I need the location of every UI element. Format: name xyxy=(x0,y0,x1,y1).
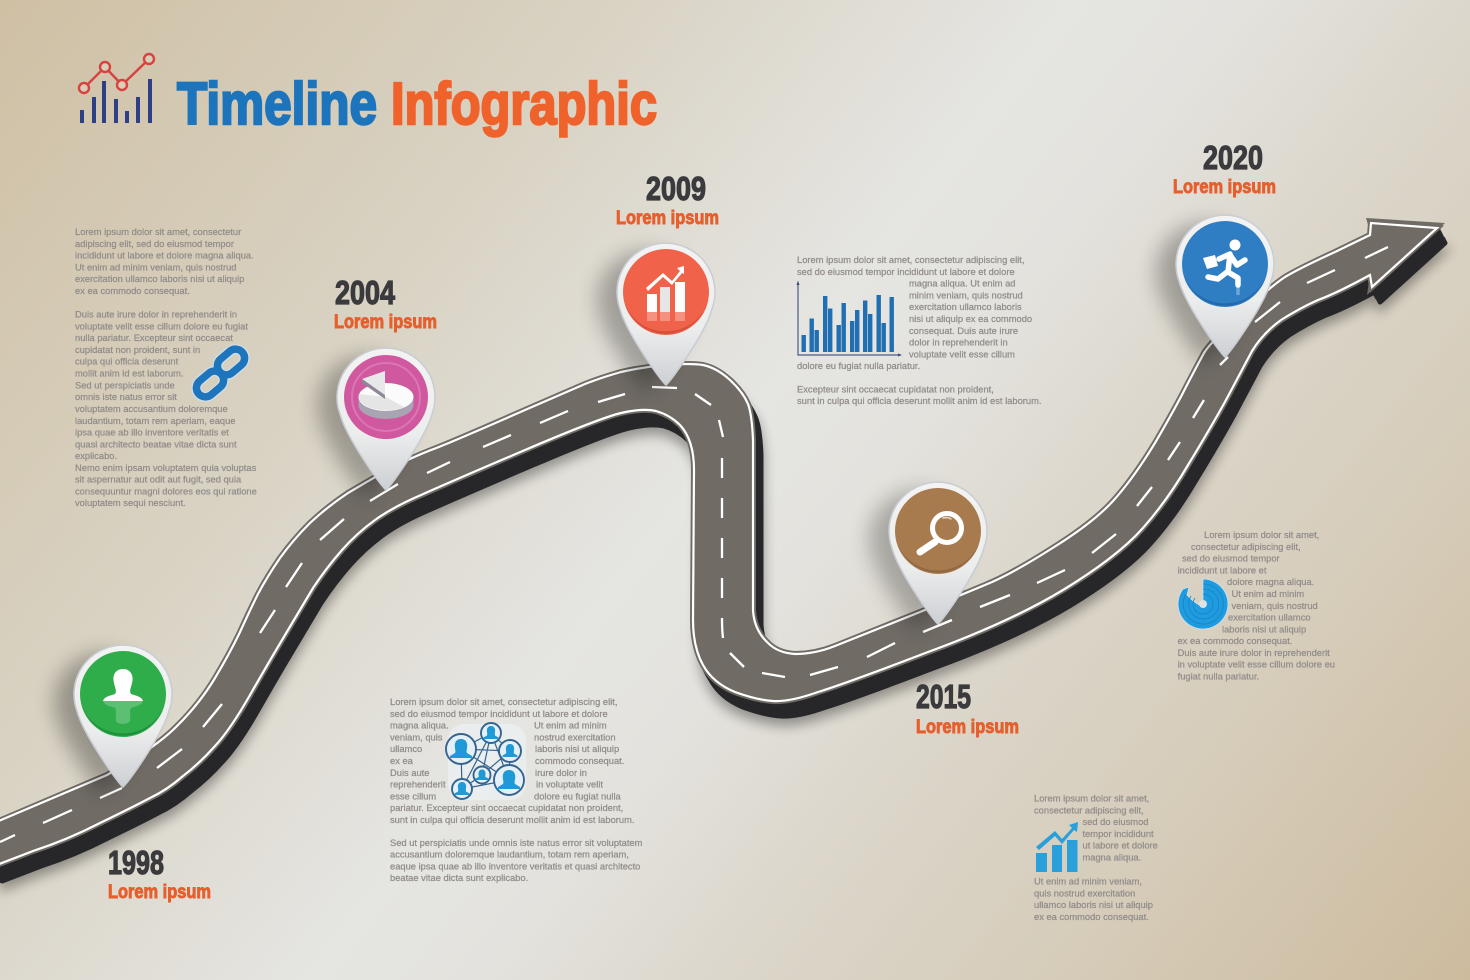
label 2015: Lorem ipsum xyxy=(916,717,1019,738)
text block: right with radial icon: veniam, quis nostrud xyxy=(1232,601,1318,611)
text block: right with radial icon: Lorem ipsum dolor sit amet, xyxy=(1204,530,1319,540)
title: Timeline xyxy=(177,71,377,137)
text block: lower centre with network icon: Duis aute xyxy=(390,768,429,778)
text block: right with radial icon: incididunt ut labore et xyxy=(1178,565,1267,575)
title xyxy=(177,71,657,137)
text block: bottom right with growth icon: Ut enim ad minim veniam, xyxy=(1034,876,1142,886)
text block: left column with link icon: Duis aute irure dolor in reprehenderit in xyxy=(75,310,237,320)
text block: right with radial icon: sed do eiusmod tempor xyxy=(1182,554,1280,564)
text block: lower centre with network icon: sed do eiusmod tempor incididunt ut labore et dolore xyxy=(390,709,608,719)
text block: lower centre with network icon: ullamco xyxy=(390,744,422,754)
text block: lower centre with network icon: commodo consequat. xyxy=(535,756,624,766)
text block: left column with link icon: culpa qui officia deserunt xyxy=(75,357,179,367)
text block: left column with link icon: consequuntur magni dolores eos qui ratione xyxy=(75,486,257,496)
text block: upper centre with bar chart: exercitation ullamco laboris xyxy=(909,302,1022,312)
text block: left column with link icon: voluptate velit esse cillum dolore eu fugiat xyxy=(75,321,248,331)
text block: bottom right with growth icon: ut labore et dolore xyxy=(1082,841,1158,851)
text block: lower centre with network icon: Lorem ipsum dolor sit amet, consectetur adipiscing elit, xyxy=(390,697,617,707)
text block: upper centre with bar chart: consequat. Duis aute irure xyxy=(909,326,1018,336)
text block: lower centre with network icon: Ut enim ad minim xyxy=(534,721,607,731)
label 2020: 2020 xyxy=(1203,139,1263,176)
label 2009 xyxy=(616,170,719,229)
text block: lower centre with network icon: esse cillum xyxy=(390,791,436,801)
label 2004: 2004 xyxy=(335,274,396,311)
text block: lower centre with network icon: accusantium doloremque laudantium, totam rem aperiam, xyxy=(390,850,629,860)
text block: bottom right with growth icon: sed do eiusmod xyxy=(1082,817,1148,827)
text block: left column with link icon: omnis iste natus error sit xyxy=(75,392,177,402)
text block: lower centre with network icon: beatae vitae dicta sunt explicabo. xyxy=(390,873,528,883)
text block: bottom right with growth icon: tempor incididunt xyxy=(1082,829,1154,839)
text block: bottom right with growth icon xyxy=(1034,794,1160,922)
text block: upper centre with bar chart: minim veniam, quis nostrud xyxy=(909,290,1023,300)
icon: magnifying glass xyxy=(920,514,962,552)
text block: lower centre with network icon: irure dolor in xyxy=(535,768,587,778)
title icon: line and bar chart xyxy=(79,54,154,123)
icon: running man with case xyxy=(1203,240,1245,295)
text block: lower centre with network icon: magna aliqua. xyxy=(390,721,449,731)
text block: right with radial icon: Duis aute irure dolor in reprehenderit xyxy=(1178,648,1330,658)
text block: left column with link icon: Ut enim ad minim veniam, quis nostrud xyxy=(75,262,237,272)
text block: bottom right with growth icon: magna aliqua. xyxy=(1082,852,1141,862)
text block: right with radial icon: laboris nisi ut aliquip xyxy=(1222,624,1306,634)
text block: bottom right with growth icon: consectetur adipiscing elit, xyxy=(1034,805,1144,815)
text block: bottom right with growth icon: quis nostrud exercitation xyxy=(1034,888,1135,898)
icon: radial chart xyxy=(1178,579,1228,629)
label 1998: 1998 xyxy=(108,844,164,881)
label 2015: 2015 xyxy=(916,678,971,715)
label 1998 xyxy=(108,844,211,903)
text block: bottom right with growth icon: ullamco laboris nisi ut aliquip xyxy=(1034,900,1153,910)
text block: left column with link icon: exercitation ullamco laboris nisi ut aliquip xyxy=(75,274,244,284)
icon: person stamp xyxy=(103,669,143,724)
label 2020 xyxy=(1173,139,1276,198)
icon: growth chart xyxy=(1036,822,1078,872)
pin 2004: magenta pie xyxy=(317,348,435,498)
text block: left column with link icon: Lorem ipsum dolor sit amet, consectetur xyxy=(75,227,241,237)
pin 1998: green person xyxy=(54,645,172,795)
text block: left column with link icon: cupidatat non proident, sunt in xyxy=(75,345,200,355)
text block: lower centre with network icon: pariatur. Excepteur sint occaecat cupidatat non proident, xyxy=(390,803,623,813)
text block: right with radial icon: in voluptate velit esse cillum dolore eu xyxy=(1178,660,1335,670)
text block: lower centre with network icon: veniam, quis xyxy=(390,732,443,742)
label 2004: Lorem ipsum xyxy=(334,312,437,333)
text block: upper centre with bar chart xyxy=(796,255,1041,406)
text block: bottom right with growth icon: Lorem ipsum dolor sit amet, xyxy=(1034,794,1149,804)
text block: left column with link icon: Sed ut perspiciatis unde xyxy=(75,380,175,390)
icon: bar chart xyxy=(796,280,902,356)
text block: left column with link icon: ipsa quae ab illo inventore veritatis et xyxy=(75,428,229,438)
text block: right with radial icon: ex ea commodo consequat. xyxy=(1178,636,1292,646)
text block: lower centre with network icon: Sed ut perspiciatis unde omnis iste natus error sit voluptatem xyxy=(390,838,643,848)
text block: lower centre with network icon xyxy=(390,697,645,883)
label 2015 xyxy=(916,678,1019,738)
text block: left column with link icon: ex ea commodo consequat. xyxy=(75,286,190,296)
text block: lower centre with network icon: dolore eu fugiat nulla xyxy=(534,791,622,801)
text block: left column with link icon: voluptatem sequi nesciunt. xyxy=(75,498,186,508)
label 2004 xyxy=(334,274,437,333)
label 2009: Lorem ipsum xyxy=(616,208,719,229)
pin 2009: orange chart xyxy=(597,243,715,393)
text block: upper centre with bar chart: nisi ut aliquip ex ea commodo xyxy=(909,314,1032,324)
text block: bottom right with growth icon: ex ea commodo consequat. xyxy=(1034,912,1149,922)
icon: pie chart xyxy=(358,371,414,419)
icon: rising bars and arrow xyxy=(646,266,685,321)
text block: left column with link icon: incididunt ut labore et dolore magna aliqua. xyxy=(75,250,254,260)
text block: right with radial icon: exercitation ullamco xyxy=(1228,612,1311,622)
text block: left column with link icon xyxy=(75,227,259,508)
road with arrow xyxy=(0,218,1445,888)
text block: left column with link icon: adipiscing elit, sed do eiusmod tempor xyxy=(75,239,234,249)
text block: right with radial icon: fugiat nulla pariatur. xyxy=(1178,671,1259,681)
text block: upper centre with bar chart: dolore eu fugiat nulla pariatur. xyxy=(797,361,920,371)
road centre dashes xyxy=(0,247,1388,842)
text block: left column with link icon: explicabo. xyxy=(75,451,117,461)
text block: upper centre with bar chart: Lorem ipsum dolor sit amet, consectetur adipiscing elit, xyxy=(797,255,1024,265)
title: Infographic xyxy=(391,71,657,137)
text block: lower centre with network icon: ex ea xyxy=(390,756,414,766)
text block: lower centre with network icon: in voluptate velit xyxy=(536,780,603,790)
text block: left column with link icon: mollit anim id est laborum. xyxy=(75,368,184,378)
label 2020: Lorem ipsum xyxy=(1173,177,1276,198)
text block: right with radial icon xyxy=(1178,530,1338,681)
text block: upper centre with bar chart: dolor in reprehenderit in xyxy=(909,338,1008,348)
text block: lower centre with network icon: nostrud exercitation xyxy=(534,732,616,742)
text block: upper centre with bar chart: voluptate velit esse cillum xyxy=(909,349,1015,359)
text block: upper centre with bar chart: sed do eiusmod tempor incididunt ut labore et dolore xyxy=(797,267,1015,277)
text block: lower centre with network icon: laboris nisi ut aliquip xyxy=(535,744,619,754)
text block: lower centre with network icon: sunt in culpa qui officia deserunt mollit anim id est laborum. xyxy=(390,815,634,825)
icon: chain link xyxy=(193,345,248,401)
text block: left column with link icon: nulla pariatur. Excepteur sint occaecat xyxy=(75,333,233,343)
text block: upper centre with bar chart: sunt in culpa qui officia deserunt mollit anim id est laborum. xyxy=(797,396,1041,406)
text block: left column with link icon: laudantium, totam rem aperiam, eaque xyxy=(75,416,236,426)
text block: right with radial icon: consectetur adipiscing elit, xyxy=(1191,542,1301,552)
label 1998: Lorem ipsum xyxy=(108,882,211,903)
text block: left column with link icon: sit aspernatur aut odit aut fugit, sed quia xyxy=(75,475,242,485)
text block: upper centre with bar chart: Excepteur sint occaecat cupidatat non proident, xyxy=(797,384,994,394)
text block: left column with link icon: Nemo enim ipsam voluptatem quia voluptas xyxy=(75,463,257,473)
text block: lower centre with network icon: eaque ipsa quae ab illo inventore veritatis et quasi architecto xyxy=(390,861,640,871)
text block: upper centre with bar chart: magna aliqua. Ut enim ad xyxy=(909,279,1015,289)
text block: right with radial icon: dolore magna aliqua. xyxy=(1227,577,1314,587)
pin 2015: brown magnifier xyxy=(869,482,987,632)
label 2009: 2009 xyxy=(646,170,706,207)
text block: left column with link icon: quasi architecto beatae vitae dicta sunt xyxy=(75,439,237,449)
pin 2020: blue runner xyxy=(1156,215,1274,365)
text block: right with radial icon: Ut enim ad minim xyxy=(1232,589,1304,599)
icon: people network xyxy=(446,723,526,800)
text block: left column with link icon: voluptatem accusantium doloremque xyxy=(75,404,228,414)
text block: lower centre with network icon: reprehenderit xyxy=(390,780,446,790)
